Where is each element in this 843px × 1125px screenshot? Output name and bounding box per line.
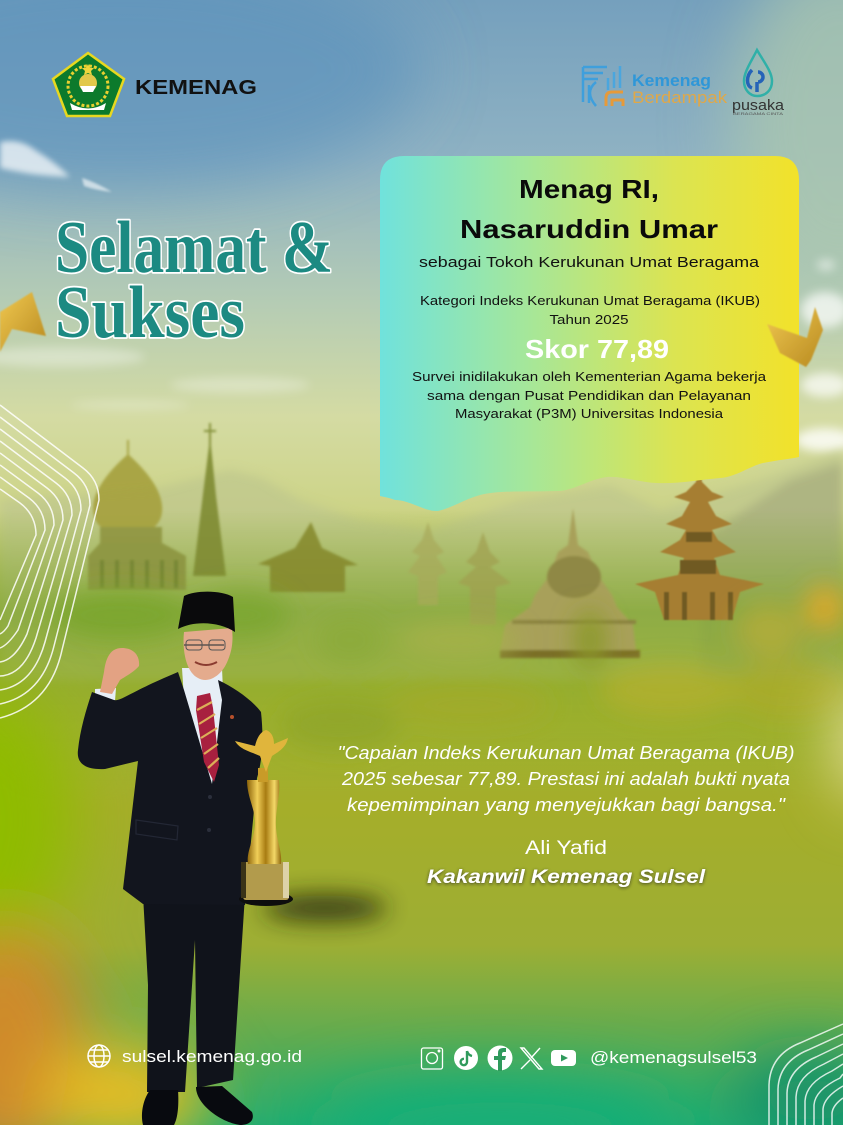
icon: instagram bbox=[422, 1048, 442, 1069]
heading: Selamat & Sukses: Sukses bbox=[55, 272, 245, 354]
social icons bbox=[422, 1046, 576, 1071]
kemenag logo bbox=[53, 53, 124, 116]
pusaka logo bbox=[732, 50, 785, 116]
survey note: sama dengan Pusat Pendidikan dan Pelayanan bbox=[427, 388, 751, 403]
card title: Menag RI, bbox=[519, 174, 659, 204]
heading: Selamat & Sukses bbox=[55, 207, 333, 354]
large pagoda bbox=[635, 458, 764, 620]
trophy shadow bbox=[263, 895, 387, 921]
tie bbox=[196, 693, 219, 782]
kemenag wordmark: KEMENAG bbox=[135, 76, 257, 99]
contour lines bottom right bbox=[769, 1024, 843, 1125]
forest band bbox=[0, 510, 843, 800]
icon: facebook bbox=[488, 1046, 512, 1071]
card year: Tahun 2025 bbox=[550, 312, 628, 327]
peci hat bbox=[178, 592, 235, 632]
pusaka logo: BERAGAMA CINTA bbox=[733, 111, 783, 116]
fist bbox=[100, 648, 139, 694]
heading: Selamat & Sukses: Selamat & bbox=[55, 207, 333, 289]
award card bbox=[380, 156, 799, 511]
survey note bbox=[412, 369, 767, 421]
quote author: Ali Yafid bbox=[525, 838, 607, 859]
kemenag berdampak logo: Kemenag bbox=[632, 71, 711, 90]
suit jacket bbox=[78, 672, 262, 905]
icon: youtube bbox=[551, 1050, 576, 1066]
website bbox=[88, 1045, 302, 1067]
contour lines left bbox=[0, 405, 99, 718]
stupa bbox=[500, 508, 640, 658]
shoes bbox=[142, 1086, 253, 1125]
mosque bbox=[88, 440, 186, 590]
gold ribbon left bbox=[0, 292, 46, 352]
quote: kepemimpinan yang menyejukkan bagi bangsa." bbox=[347, 795, 787, 815]
tree clumps bbox=[50, 584, 843, 751]
kemenag berdampak logo bbox=[583, 66, 728, 107]
gold ribbon right bbox=[767, 307, 823, 367]
card subtitle: sebagai Tokoh Kerukunan Umat Beragama bbox=[419, 254, 760, 271]
website: sulsel.kemenag.go.id bbox=[122, 1047, 302, 1066]
card category: Kategori Indeks Kerukunan Umat Beragama (IKUB) bbox=[420, 293, 760, 308]
clouds bbox=[0, 141, 843, 452]
kemenag berdampak logo: Berdampak bbox=[632, 88, 728, 107]
jacket pocket and buttons bbox=[136, 820, 178, 840]
author role: Kakanwil Kemenag Sulsel bbox=[427, 867, 706, 888]
trophy bbox=[235, 730, 293, 906]
small pagodas bbox=[408, 522, 511, 625]
icon: tiktok bbox=[454, 1046, 478, 1070]
pusaka logo: pusaka bbox=[732, 97, 785, 114]
shirt and cuff bbox=[182, 668, 226, 790]
bottom colour glows bbox=[0, 680, 843, 1125]
neck and face bbox=[184, 628, 233, 680]
temple bbox=[258, 522, 358, 592]
score: Skor 77,89 bbox=[525, 334, 669, 364]
mountains bbox=[0, 450, 843, 680]
survey note: Survei inidilakukan oleh Kementerian Agama bekerja bbox=[412, 369, 767, 384]
quote bbox=[338, 743, 794, 815]
icon: X bbox=[521, 1048, 542, 1069]
church spire bbox=[193, 423, 226, 576]
quote: "Capaian Indeks Kerukunan Umat Beragama (IKUB) bbox=[338, 743, 794, 763]
legs bbox=[143, 895, 245, 1092]
icon: globe bbox=[88, 1045, 110, 1067]
social handle: @kemenagsulsel53 bbox=[590, 1049, 757, 1067]
card name: Nasaruddin Umar bbox=[460, 214, 718, 244]
survey note: Masyarakat (P3M) Universitas Indonesia bbox=[455, 406, 724, 421]
sky tint bbox=[0, 0, 843, 290]
quote: 2025 sebesar 77,89. Prestasi ini adalah bukti nyata bbox=[341, 769, 790, 789]
minister figure bbox=[78, 592, 262, 1125]
